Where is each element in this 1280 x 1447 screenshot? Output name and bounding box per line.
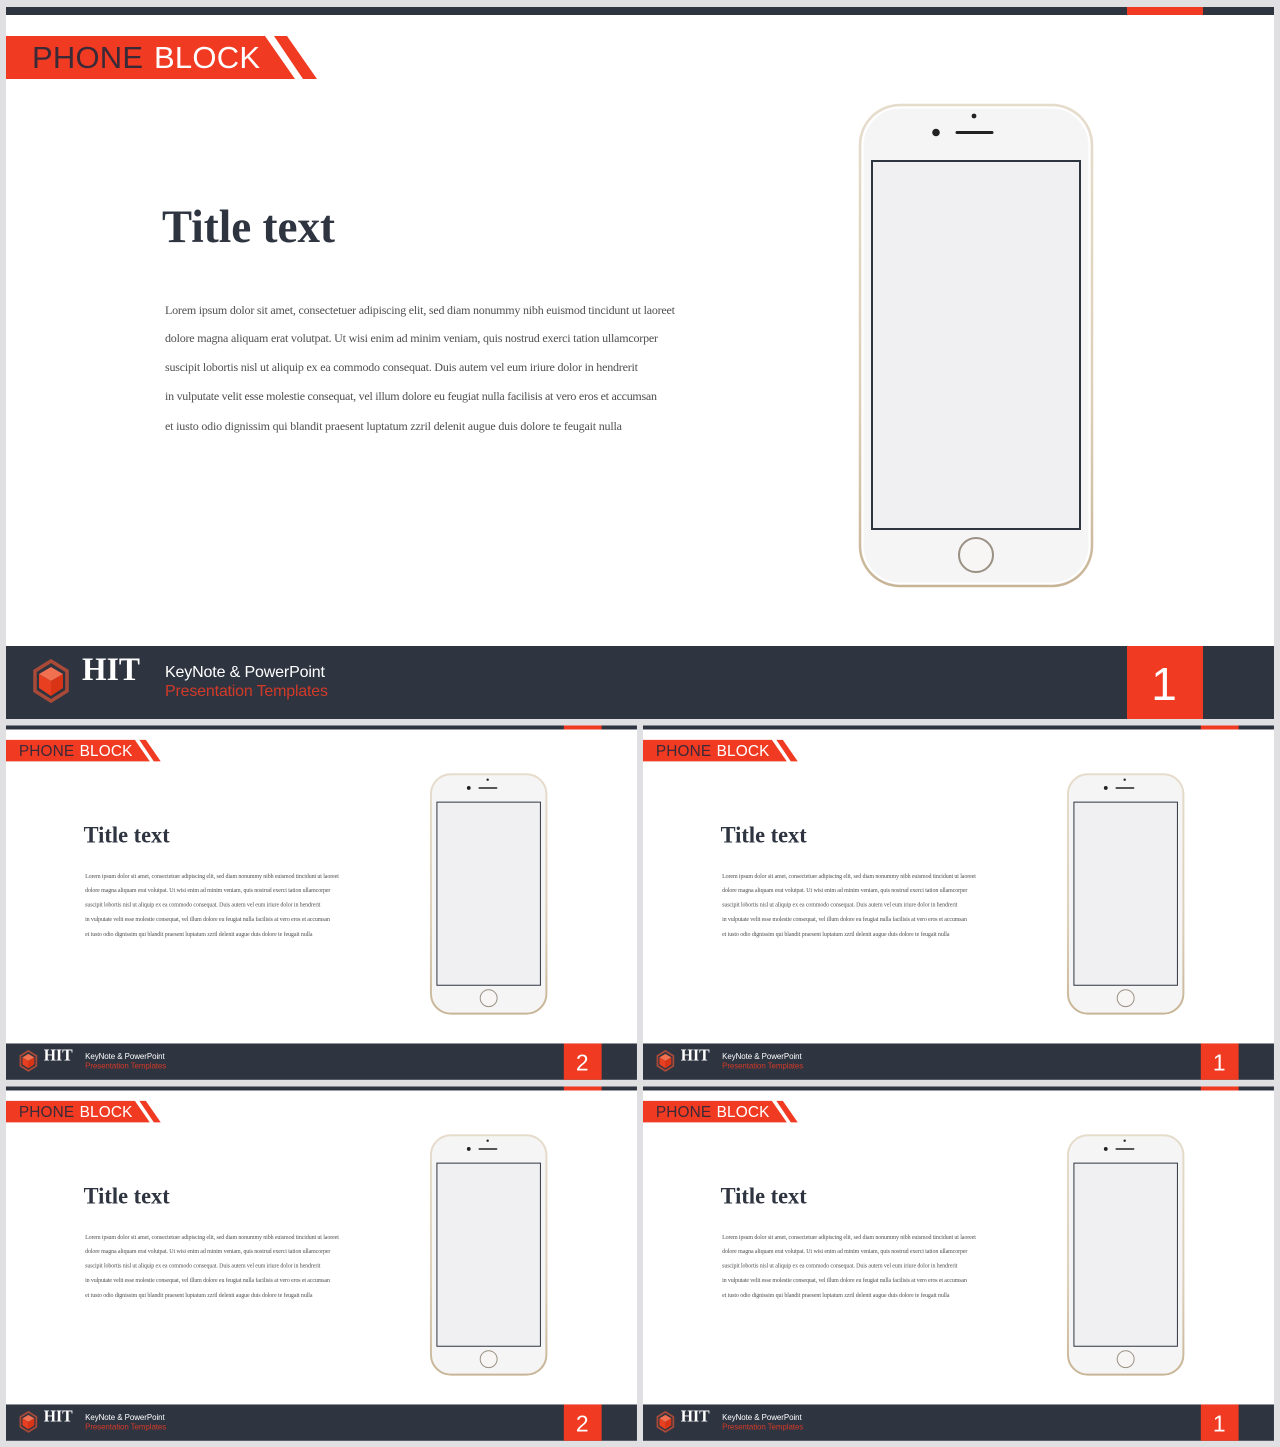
heading: title text: Title text — [84, 822, 170, 848]
text block: lorem ipsum — [722, 1235, 976, 1299]
banner: PHONE BLOCK: PHONE — [32, 40, 143, 75]
page number: 1 — [1213, 1049, 1226, 1075]
icon: phone mockup — [431, 1135, 546, 1375]
tagline: KeyNote and PowerPoint: KeyNote & PowerPoint — [85, 1413, 166, 1422]
tagline: KeyNote and PowerPoint: KeyNote & PowerPoint — [165, 664, 326, 681]
tagline: Presentation Templates: Presentation Templates — [85, 1061, 166, 1070]
icon: phone mockup — [431, 774, 546, 1014]
text block: lorem ipsum: et iusto odio dignissim qui blandit praesent luptatum zzril delenit augue duis dolore te feugait nulla — [722, 931, 950, 938]
text block: lorem ipsum: et iusto odio dignissim qui blandit praesent luptatum zzril delenit augue duis dolore te feugait nulla — [85, 931, 313, 938]
page number: 1 — [1151, 658, 1177, 710]
banner: PHONE BLOCK — [643, 740, 798, 761]
top bar — [643, 725, 1274, 729]
panel: small slide bottom right — [643, 1086, 1274, 1441]
text block: lorem ipsum: in vulputate velit esse molestie consequat, vel illum dolore eu feugiat nulla facilisis at vero eros et accumsan — [722, 1277, 967, 1284]
icon: phone mockup — [1068, 1135, 1183, 1375]
text block: lorem ipsum: Lorem ipsum dolor sit amet, consectetuer adipiscing elit, sed diam nonummy nibh euismod tincidunt ut laoreet — [85, 1235, 339, 1241]
text block: lorem ipsum — [722, 874, 976, 938]
banner: PHONE BLOCK: BLOCK — [80, 1104, 133, 1121]
icon: red hexagon cube — [657, 1412, 673, 1432]
footer bar — [6, 1404, 637, 1441]
banner: PHONE BLOCK: BLOCK — [717, 1104, 770, 1121]
banner: PHONE BLOCK: PHONE — [19, 743, 74, 760]
page number — [564, 1404, 602, 1441]
icon: phone mockup — [860, 105, 1092, 586]
text block: lorem ipsum: suscipit lobortis nisl ut aliquip ex ea commodo consequat. Duis autem vel eum iriure dolor in hendrerit — [165, 360, 639, 374]
banner: PHONE BLOCK — [643, 1101, 798, 1122]
heading: title text: Title text — [162, 201, 335, 253]
page number — [1201, 1043, 1239, 1080]
banner: PHONE BLOCK: PHONE — [656, 743, 711, 760]
banner: PHONE BLOCK: PHONE — [656, 1104, 711, 1121]
text block: lorem ipsum: suscipit lobortis nisl ut aliquip ex ea commodo consequat. Duis autem vel eum iriure dolor in hendrerit — [722, 903, 958, 909]
icon: red hexagon cube — [20, 1412, 36, 1432]
banner: PHONE BLOCK: BLOCK — [717, 743, 770, 760]
tagline: KeyNote and PowerPoint: KeyNote & PowerPoint — [722, 1052, 803, 1061]
page number: 1 — [1213, 1410, 1226, 1436]
logo text: HIT: HIT — [681, 1045, 710, 1064]
footer bar — [643, 1404, 1274, 1441]
icon: red hexagon cube — [35, 661, 67, 701]
text block: lorem ipsum: Lorem ipsum dolor sit amet, consectetuer adipiscing elit, sed diam nonummy nibh euismod tincidunt ut laoreet — [722, 1235, 976, 1241]
icon: red hexagon cube — [657, 1051, 673, 1071]
heading: title text: Title text — [84, 1183, 170, 1209]
text block: lorem ipsum: et iusto odio dignissim qui blandit praesent luptatum zzril delenit augue duis dolore te feugait nulla — [165, 419, 623, 433]
text block: lorem ipsum: dolore magna aliquam erat volutpat. Ut wisi enim ad minim veniam, quis nostrud exerci tation ullamcorper — [165, 331, 658, 345]
heading: title text: Title text — [721, 1183, 807, 1209]
page number — [564, 1043, 602, 1080]
banner: PHONE BLOCK — [6, 740, 161, 761]
logo text: HIT: HIT — [44, 1406, 73, 1425]
text block: lorem ipsum — [85, 874, 339, 938]
top bar — [6, 1086, 637, 1090]
page number: 2 — [576, 1410, 589, 1436]
text block: lorem ipsum: et iusto odio dignissim qui blandit praesent luptatum zzril delenit augue duis dolore te feugait nulla — [722, 1292, 950, 1299]
text block: lorem ipsum: in vulputate velit esse molestie consequat, vel illum dolore eu feugiat nulla facilisis at vero eros et accumsan — [165, 389, 657, 403]
top bar — [643, 1086, 1274, 1090]
banner: PHONE BLOCK: BLOCK — [80, 743, 133, 760]
text block: lorem ipsum: Lorem ipsum dolor sit amet, consectetuer adipiscing elit, sed diam nonummy nibh euismod tincidunt ut laoreet — [85, 874, 339, 880]
text block: lorem ipsum: in vulputate velit esse molestie consequat, vel illum dolore eu feugiat nulla facilisis at vero eros et accumsan — [722, 916, 967, 923]
heading: title text: Title text — [721, 822, 807, 848]
text block: lorem ipsum: dolore magna aliquam erat volutpat. Ut wisi enim ad minim veniam, quis nostrud exerci tation ullamcorper — [85, 1249, 330, 1255]
page number — [1127, 646, 1203, 719]
panel: small slide bottom left — [6, 1086, 637, 1441]
logo text: HIT: HIT — [681, 1406, 710, 1425]
icon: phone mockup — [1068, 774, 1183, 1014]
tagline: Presentation Templates: Presentation Templates — [165, 683, 328, 700]
text block: lorem ipsum: dolore magna aliquam erat volutpat. Ut wisi enim ad minim veniam, quis nostrud exerci tation ullamcorper — [722, 888, 967, 894]
footer bar — [643, 1043, 1274, 1080]
text block: lorem ipsum: in vulputate velit esse molestie consequat, vel illum dolore eu feugiat nulla facilisis at vero eros et accumsan — [85, 1277, 330, 1284]
banner: PHONE BLOCK: BLOCK — [154, 40, 260, 75]
banner: PHONE BLOCK — [6, 1101, 161, 1122]
tagline: Presentation Templates: Presentation Templates — [722, 1422, 803, 1431]
logo text: HIT: HIT — [44, 1045, 73, 1064]
panel: large slide 1 — [6, 7, 1274, 719]
text block: lorem ipsum: suscipit lobortis nisl ut aliquip ex ea commodo consequat. Duis autem vel eum iriure dolor in hendrerit — [722, 1264, 958, 1270]
panel: small slide top right — [643, 725, 1274, 1080]
page number: 2 — [576, 1049, 589, 1075]
icon: red hexagon cube — [20, 1051, 36, 1071]
page number — [1201, 1404, 1239, 1441]
text block: lorem ipsum: dolore magna aliquam erat volutpat. Ut wisi enim ad minim veniam, quis nostrud exerci tation ullamcorper — [722, 1249, 967, 1255]
text block: lorem ipsum: Lorem ipsum dolor sit amet, consectetuer adipiscing elit, sed diam nonummy nibh euismod tincidunt ut laoreet — [722, 874, 976, 880]
text block: lorem ipsum: in vulputate velit esse molestie consequat, vel illum dolore eu feugiat nulla facilisis at vero eros et accumsan — [85, 916, 330, 923]
text block: lorem ipsum: suscipit lobortis nisl ut aliquip ex ea commodo consequat. Duis autem vel eum iriure dolor in hendrerit — [85, 903, 321, 909]
banner: PHONE BLOCK: PHONE — [19, 1104, 74, 1121]
banner: PHONE BLOCK — [6, 36, 317, 79]
logo text: HIT: HIT — [82, 652, 140, 688]
footer bar — [6, 1043, 637, 1080]
text block: lorem ipsum: et iusto odio dignissim qui blandit praesent luptatum zzril delenit augue duis dolore te feugait nulla — [85, 1292, 313, 1299]
text block: lorem ipsum: suscipit lobortis nisl ut aliquip ex ea commodo consequat. Duis autem vel eum iriure dolor in hendrerit — [85, 1264, 321, 1270]
panel: small slide top left — [6, 725, 637, 1080]
tagline: KeyNote and PowerPoint: KeyNote & PowerPoint — [722, 1413, 803, 1422]
tagline: KeyNote and PowerPoint: KeyNote & PowerPoint — [85, 1052, 166, 1061]
tagline: Presentation Templates: Presentation Templates — [722, 1061, 803, 1070]
tagline: Presentation Templates: Presentation Templates — [85, 1422, 166, 1431]
top bar — [6, 725, 637, 729]
text block: lorem ipsum: Lorem ipsum dolor sit amet, consectetuer adipiscing elit, sed diam nonummy nibh euismod tincidunt ut laoreet — [165, 303, 676, 317]
top bar — [6, 7, 1274, 15]
text block: lorem ipsum — [85, 1235, 339, 1299]
footer bar — [6, 646, 1274, 719]
text block: lorem ipsum: dolore magna aliquam erat volutpat. Ut wisi enim ad minim veniam, quis nostrud exerci tation ullamcorper — [85, 888, 330, 894]
text block: lorem ipsum — [165, 303, 676, 433]
